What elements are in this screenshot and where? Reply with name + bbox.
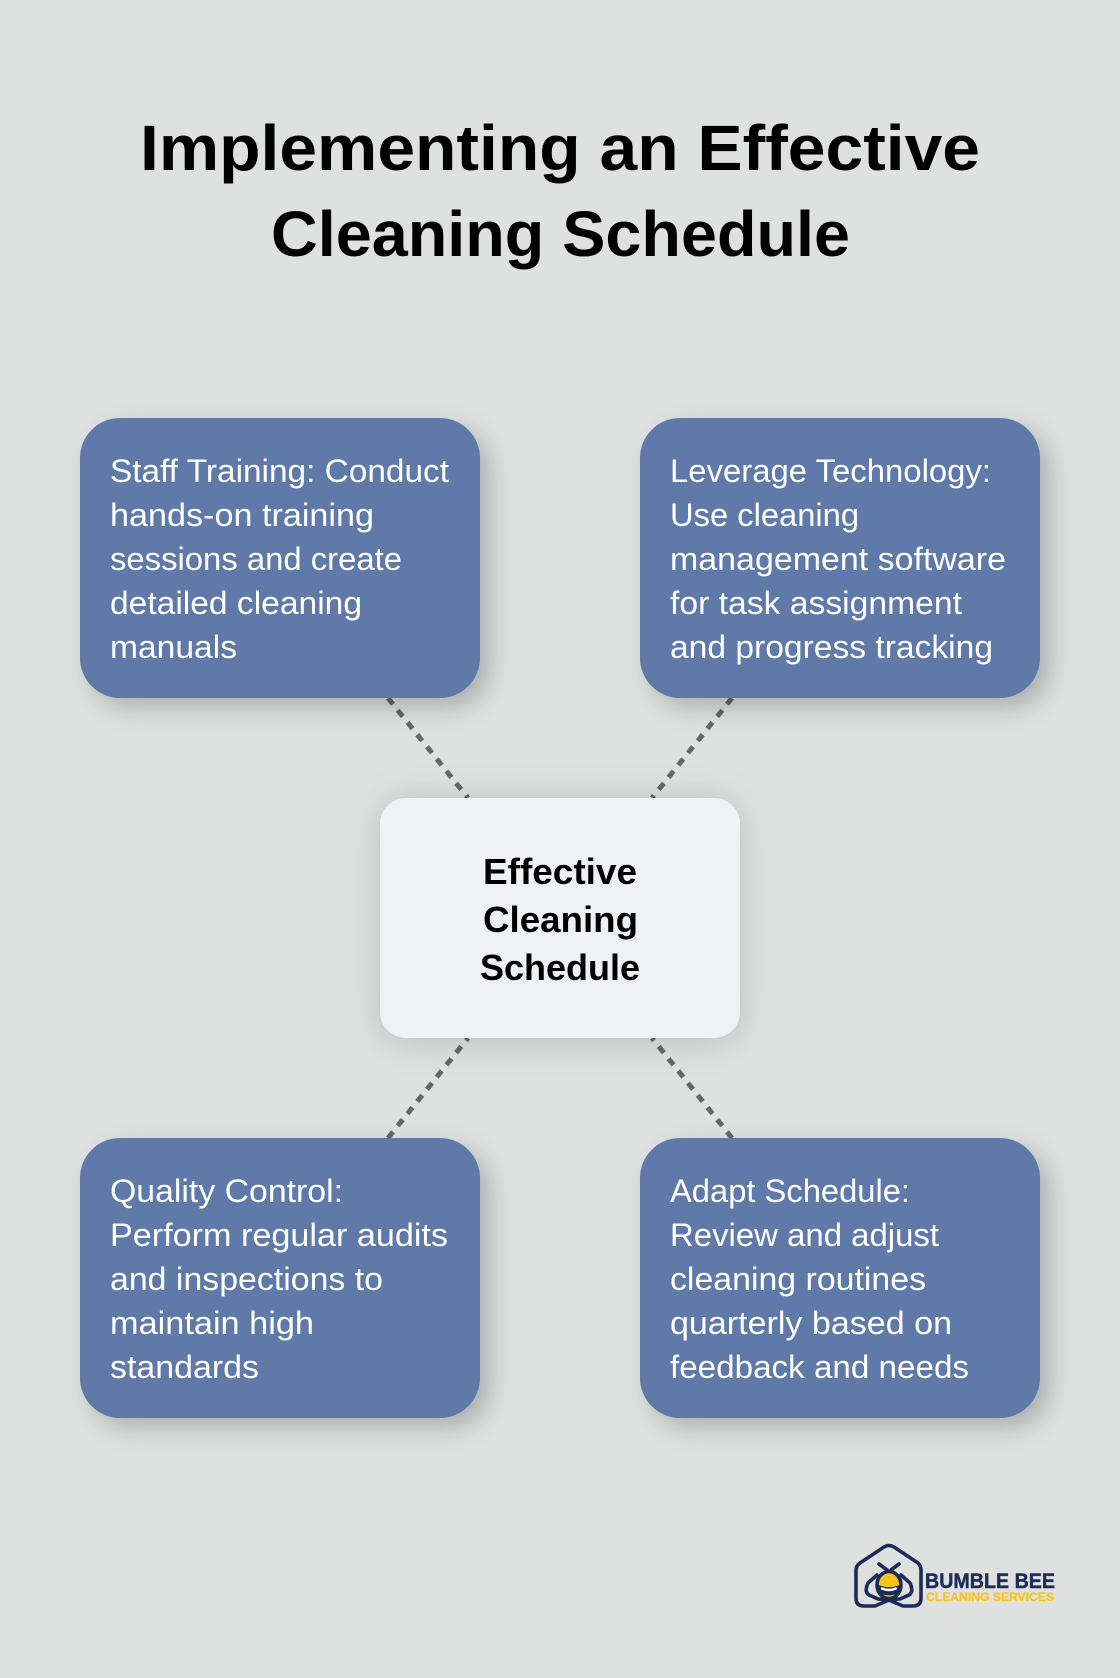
panel: staff training: detailed cleaning bbox=[110, 585, 362, 621]
panel: adapt schedule: quarterly based on bbox=[670, 1305, 952, 1341]
panel: adapt schedule bbox=[640, 1138, 1040, 1418]
panel: staff training: manuals bbox=[110, 629, 237, 665]
title bbox=[140, 112, 980, 270]
panel: adapt schedule: Review and adjust bbox=[670, 1217, 939, 1253]
panel: leverage technology bbox=[640, 418, 1040, 698]
panel: centre node: Effective bbox=[483, 851, 637, 892]
panel: quality control: standards bbox=[110, 1349, 259, 1385]
panel: quality control: Perform regular audits bbox=[110, 1217, 448, 1253]
arrow: dashed connector, staff training to centre bbox=[388, 698, 468, 798]
logo: Bumble Bee Cleaning Services bbox=[856, 1546, 1055, 1606]
arrow: dashed connector, quality control to centre bbox=[388, 1038, 468, 1138]
panel: centre node bbox=[380, 798, 740, 1038]
logo: Bumble Bee Cleaning Services: CLEANING SERVICES bbox=[926, 1590, 1054, 1604]
panel: leverage technology: management software bbox=[670, 541, 1006, 577]
panel: adapt schedule: Adapt Schedule: bbox=[670, 1173, 910, 1209]
arrow: dashed connector, leverage technology to centre bbox=[652, 698, 732, 798]
panel: adapt schedule: cleaning routines bbox=[670, 1261, 926, 1297]
panel: staff training bbox=[80, 418, 480, 698]
arrow: dashed connector, adapt schedule to centre bbox=[652, 1038, 732, 1138]
logo: Bumble Bee Cleaning Services: BUMBLE BEE bbox=[925, 1570, 1055, 1593]
panel: leverage technology: Use cleaning bbox=[670, 497, 859, 533]
panel: leverage technology: for task assignment bbox=[670, 585, 962, 621]
title: Implementing an Effective bbox=[140, 112, 980, 184]
panel: quality control: Quality Control: bbox=[110, 1173, 343, 1209]
title: Cleaning Schedule bbox=[271, 198, 850, 270]
panel: centre node: Schedule bbox=[480, 947, 640, 988]
panel: staff training: Staff Training: Conduct bbox=[110, 453, 449, 489]
panel: quality control: maintain high bbox=[110, 1305, 314, 1341]
panel: staff training: sessions and create bbox=[110, 541, 402, 577]
panel: leverage technology: and progress tracking bbox=[670, 629, 993, 665]
panel: staff training: hands-on training bbox=[110, 497, 374, 533]
panel: adapt schedule: feedback and needs bbox=[670, 1349, 969, 1385]
icon: house with bee bbox=[856, 1546, 921, 1606]
panel: quality control: and inspections to bbox=[110, 1261, 383, 1297]
panel: quality control bbox=[80, 1138, 480, 1418]
panel: leverage technology: Leverage Technology: bbox=[670, 453, 991, 489]
panel: centre node: Cleaning bbox=[483, 899, 638, 940]
